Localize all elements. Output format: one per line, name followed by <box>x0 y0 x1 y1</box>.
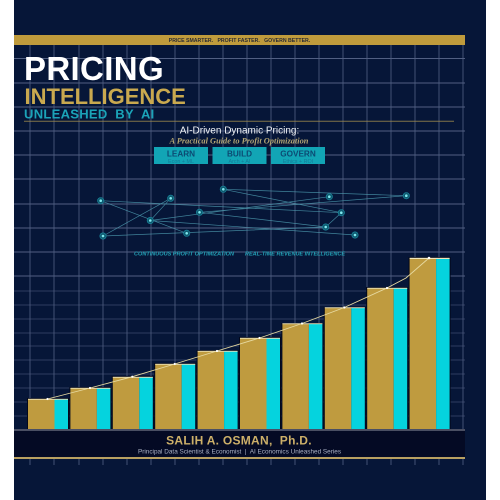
box: learn: Econ + ML <box>168 159 194 165</box>
gold bars <box>28 258 436 429</box>
title <box>24 50 186 122</box>
bar top highlights <box>28 258 450 400</box>
box: govern: Ethics + ROI <box>283 159 313 165</box>
box: govern <box>271 147 325 165</box>
author band: Principal Data Scientist & Economist | AI Economics Unleashed Series <box>138 448 341 455</box>
title: PRICING <box>24 50 164 87</box>
author band <box>14 429 465 459</box>
subtitle: A Practical Guide to Profit Optimization <box>169 136 309 146</box>
subtitle <box>169 126 309 146</box>
author band: SALIH A. OSMAN, Ph.D. <box>166 434 312 448</box>
box: govern: GOVERN <box>280 150 316 158</box>
box: build <box>212 147 266 165</box>
box: learn <box>154 147 208 165</box>
top banner <box>14 35 465 45</box>
title: INTELLIGENCE <box>24 84 186 109</box>
box: build: BUILD <box>227 150 252 158</box>
bar shadows <box>27 257 451 429</box>
subtitle: AI-Driven Dynamic Pricing: <box>180 126 299 136</box>
box: build: Arch + AI <box>228 159 251 165</box>
box: learn: LEARN <box>167 150 195 158</box>
bar chart <box>27 257 451 429</box>
network diagram <box>98 186 409 239</box>
tagline labels <box>134 252 345 258</box>
top banner: PRICE SMARTER. PROFIT FASTER. GOVERN BETTER. <box>169 38 311 44</box>
tagline labels: REAL-TIME REVENUE INTELLIGENCE <box>245 252 345 258</box>
title: UNLEASHED BY AI <box>24 106 155 122</box>
tagline labels: CONTINUOUS PROFIT OPTIMIZATION <box>134 252 235 258</box>
trend line <box>46 257 430 400</box>
cyan bars <box>54 258 450 429</box>
pillar boxes <box>154 147 325 165</box>
